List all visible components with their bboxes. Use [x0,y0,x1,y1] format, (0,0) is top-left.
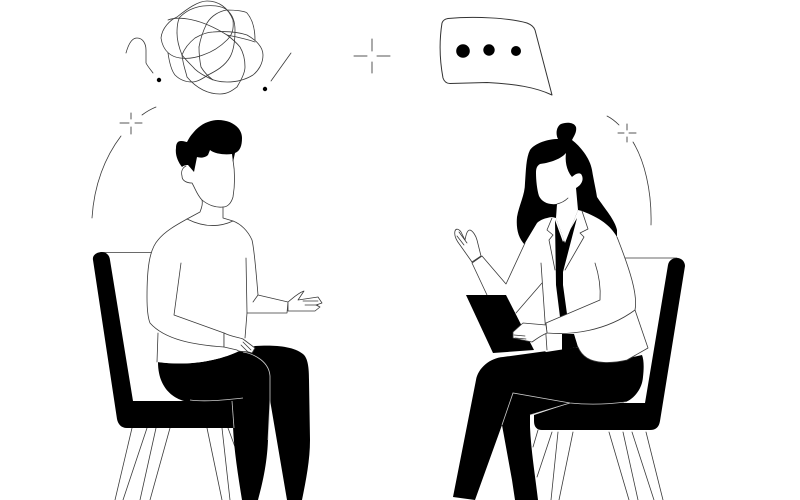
panel: therapist chair [533,258,685,500]
therapist black shirt panel [555,218,577,317]
icon: tangled scribble thought [161,1,263,94]
therapist hand on tablet [513,323,547,342]
patient neck and face [182,160,234,221]
icon: speech bubble with dots [440,17,552,95]
therapist chin line [557,198,568,204]
patient open hand [288,291,322,311]
therapist hair [517,123,617,248]
figure: patient [147,120,322,500]
icon: question mark [126,38,161,82]
therapist trousers [453,347,644,500]
therapist tablet [466,295,534,353]
patient hair [176,120,242,172]
panel: patient chair [93,252,238,500]
icon: center sparkle [354,39,390,73]
icon: exclamation mark [263,53,291,91]
patient sweater [147,200,288,364]
patient left hand on knee [224,333,255,353]
icon: left sparkle with arc [92,107,156,218]
therapist raised hand [455,229,481,262]
icon: right sparkle with arc [607,116,651,225]
therapist face and neck [536,153,583,243]
patient trousers [158,346,310,500]
therapist jacket [472,210,648,362]
figure: therapist [453,123,648,500]
